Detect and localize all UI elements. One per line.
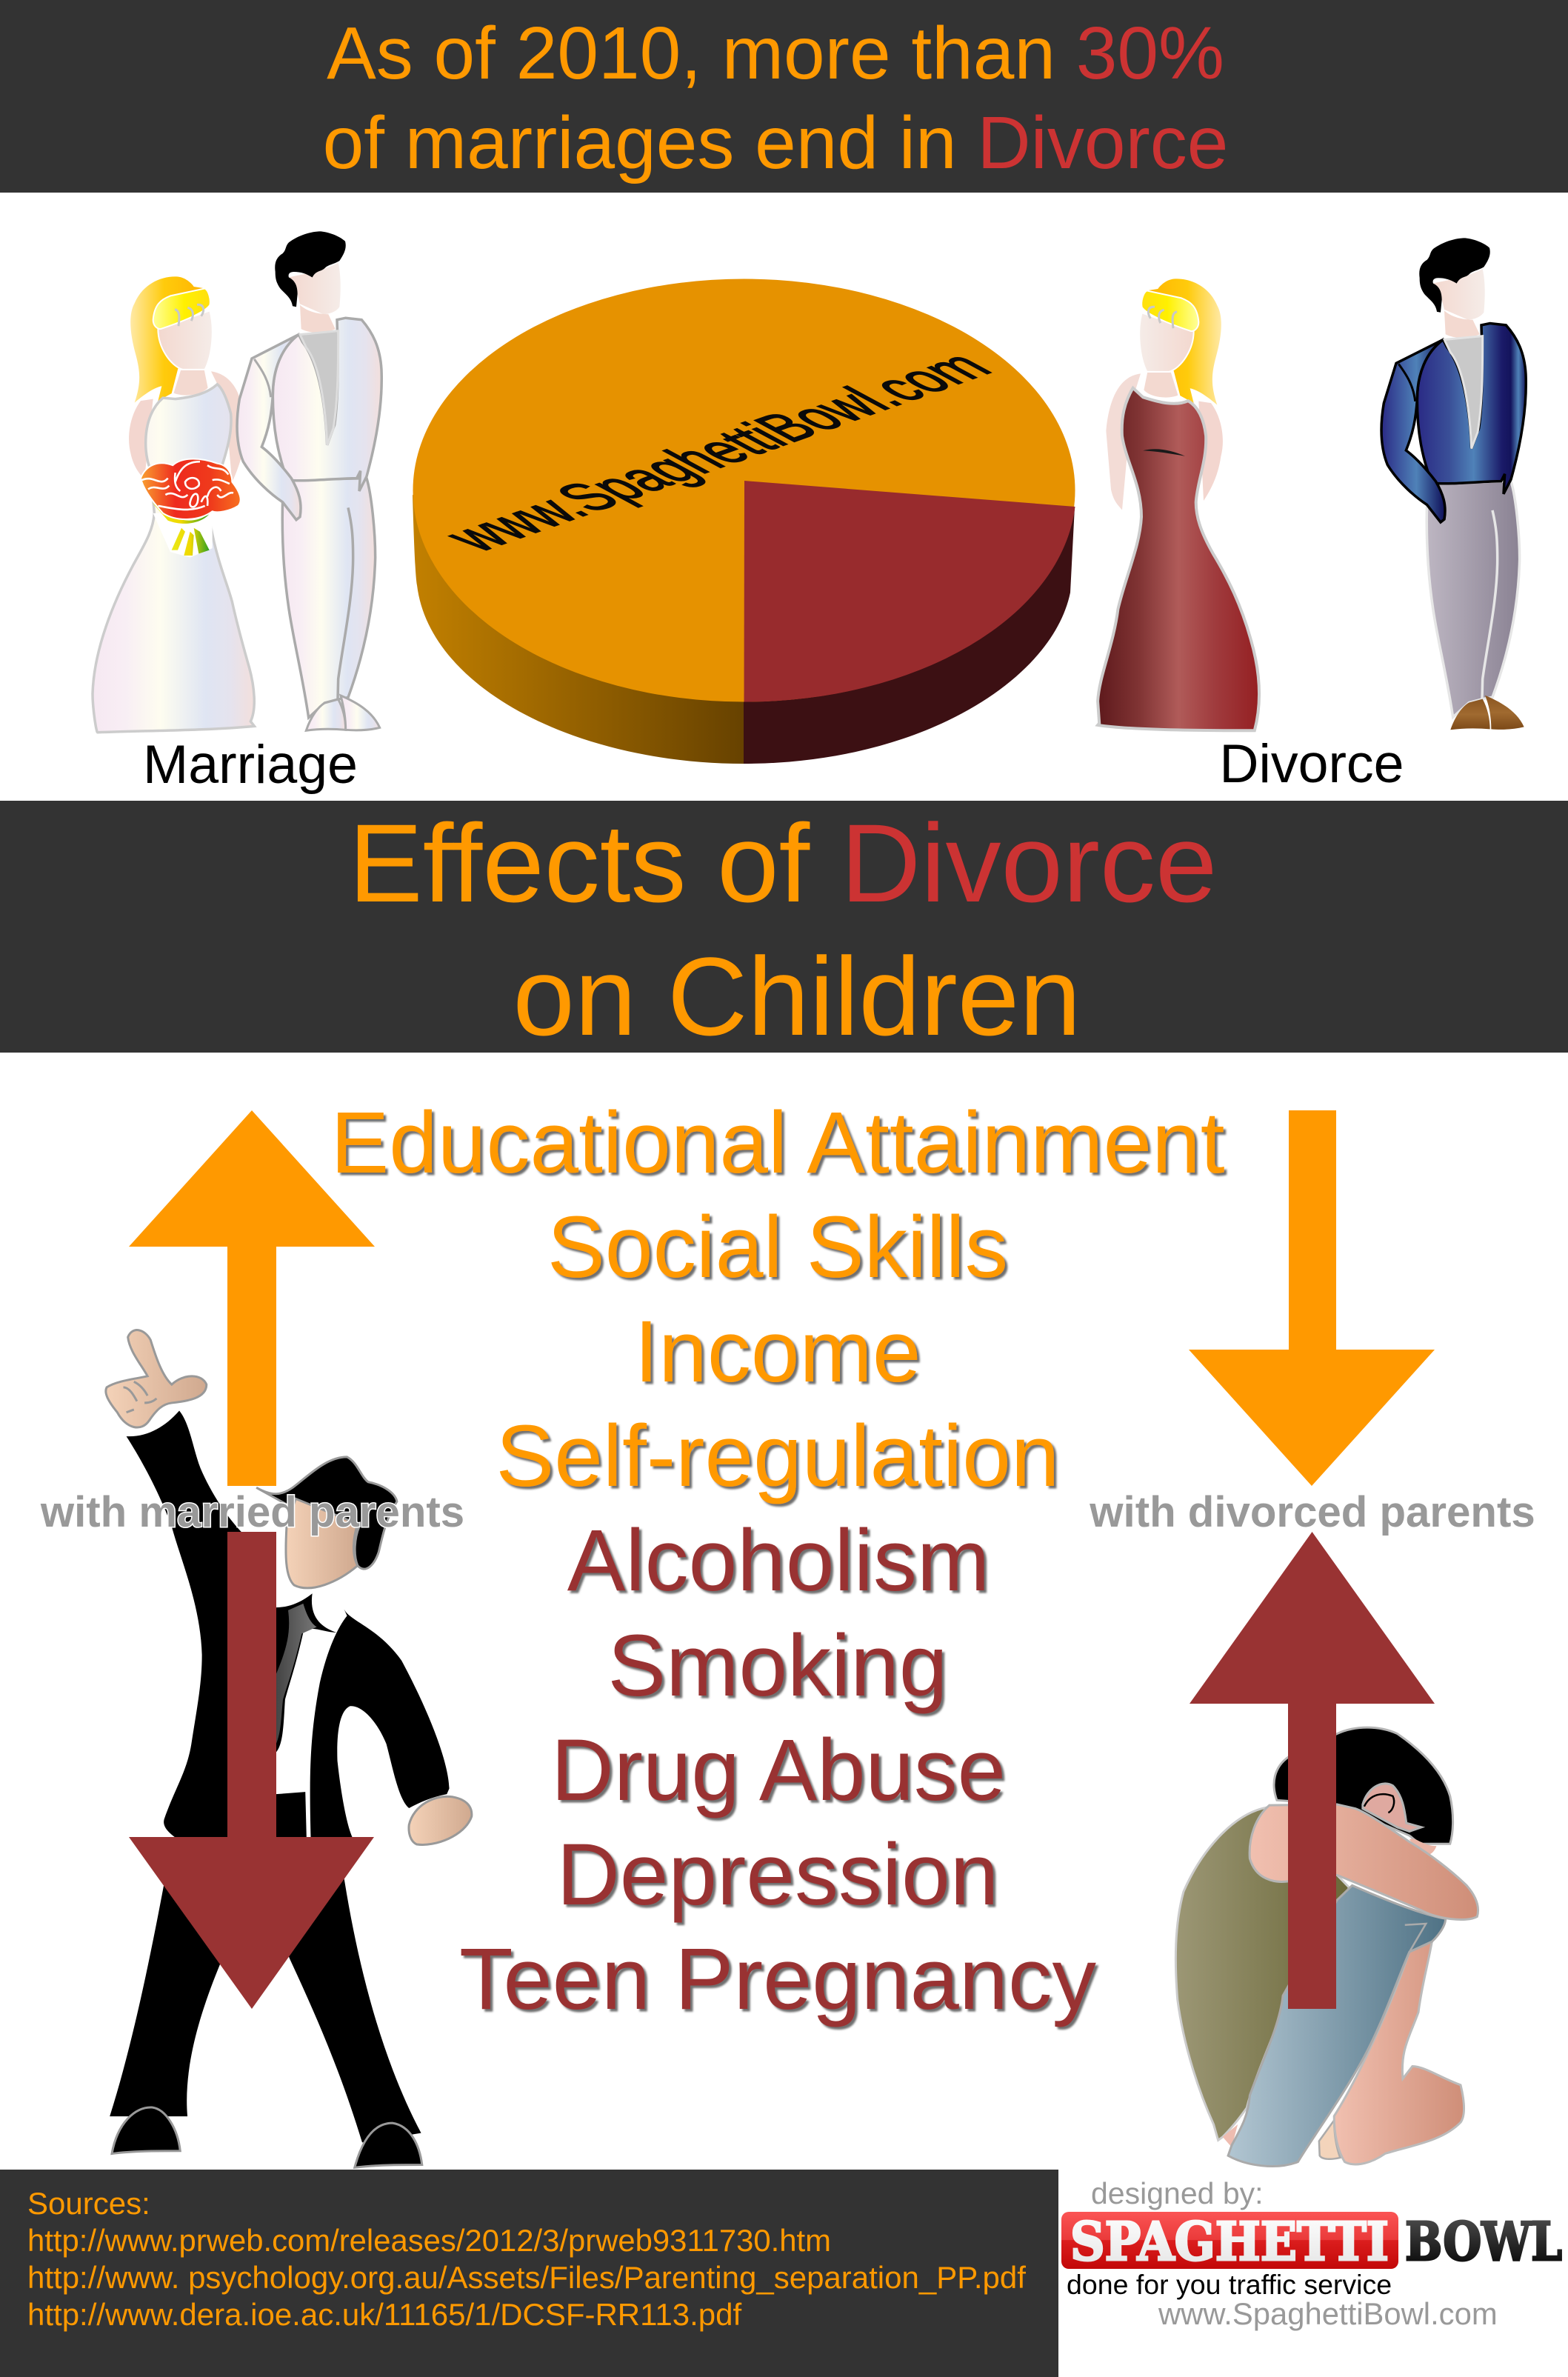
sources panel bbox=[0, 2170, 1058, 2377]
illustration: sad child hugging knees bbox=[1175, 1727, 1478, 2167]
list of effects: positive outcomes bbox=[330, 1094, 1225, 1505]
website: www.SpaghettiBowl.com bbox=[1158, 2296, 1498, 2331]
label: Divorce: Divorce bbox=[1219, 733, 1404, 794]
list of effects: positive outcomes: Income bbox=[635, 1303, 921, 1401]
illustration: divorced man in blue jacket bbox=[1381, 238, 1526, 730]
label: with married parents: with married parents bbox=[40, 1488, 464, 1536]
pie label: www.SpaghettiBowl.com bbox=[427, 344, 1007, 559]
illustration: cheerful man in black suit bbox=[106, 1330, 472, 2167]
list of effects: negative outcomes: Alcoholism bbox=[567, 1512, 990, 1610]
effects heading banner bbox=[0, 801, 1568, 1059]
list of effects: positive outcomes: Self-regulation bbox=[496, 1407, 1059, 1505]
sources text: http://www.dera.ioe.ac.uk/11165/1/DCSF-RR113.pdf bbox=[27, 2297, 741, 2332]
heading line 2: on Children bbox=[513, 934, 1081, 1059]
list of effects: positive outcomes: Social Skills bbox=[547, 1198, 1008, 1296]
heading line 1: Effects of Divorce bbox=[349, 801, 1217, 925]
arrow: orange down, divorced parents bbox=[1189, 1110, 1435, 1486]
illustration: groom in white suit bbox=[237, 231, 381, 730]
top banner bbox=[0, 0, 1568, 193]
list of effects: positive outcomes: Educational Attainment bbox=[330, 1094, 1225, 1192]
list of effects: negative outcomes: Drug Abuse bbox=[551, 1721, 1006, 1819]
arrow: red down, married parents bbox=[129, 1532, 374, 2009]
arrow: red up, divorced parents bbox=[1190, 1532, 1435, 2009]
logo: SPAGHETTI: SPAGHETTI bbox=[1070, 2210, 1389, 2273]
logo: red badge bbox=[1061, 2212, 1398, 2269]
illustration: bride in red dress (head and arms) bbox=[1106, 279, 1223, 510]
icon: bouquet bbox=[141, 459, 241, 558]
list of effects: negative outcomes bbox=[459, 1512, 1096, 2028]
pie chart: 30 percent of marriages end in divorce bbox=[413, 279, 1075, 764]
sources text: Sources: bbox=[27, 2186, 150, 2221]
illustration: red dress bbox=[1098, 388, 1259, 730]
label: with divorced parents: with divorced parents bbox=[1089, 1488, 1535, 1536]
designer credit and logo bbox=[1061, 2176, 1562, 2331]
sources text: http://www.prweb.com/releases/2012/3/prweb9311730.htm bbox=[27, 2223, 831, 2258]
sources text bbox=[27, 2186, 1026, 2332]
label: Marriage: Marriage bbox=[143, 733, 358, 795]
title line 2: of marriages end in Divorce bbox=[323, 101, 1228, 184]
list of effects: negative outcomes: Smoking bbox=[607, 1617, 948, 1715]
list of effects: negative outcomes: Depression bbox=[557, 1826, 998, 1924]
list of effects: negative outcomes: Teen Pregnancy bbox=[459, 1930, 1096, 2028]
tagline: done for you traffic service bbox=[1067, 2269, 1392, 2300]
title line 1: As of 2010, more than 30% bbox=[327, 12, 1224, 95]
designed by: designed by: bbox=[1091, 2176, 1264, 2210]
illustration: bride in white bbox=[93, 276, 254, 733]
sources text: http://www. psychology.org.au/Assets/Files/Parenting_separation_PP.pdf bbox=[27, 2260, 1026, 2295]
arrow: orange up, married parents bbox=[129, 1110, 375, 1486]
